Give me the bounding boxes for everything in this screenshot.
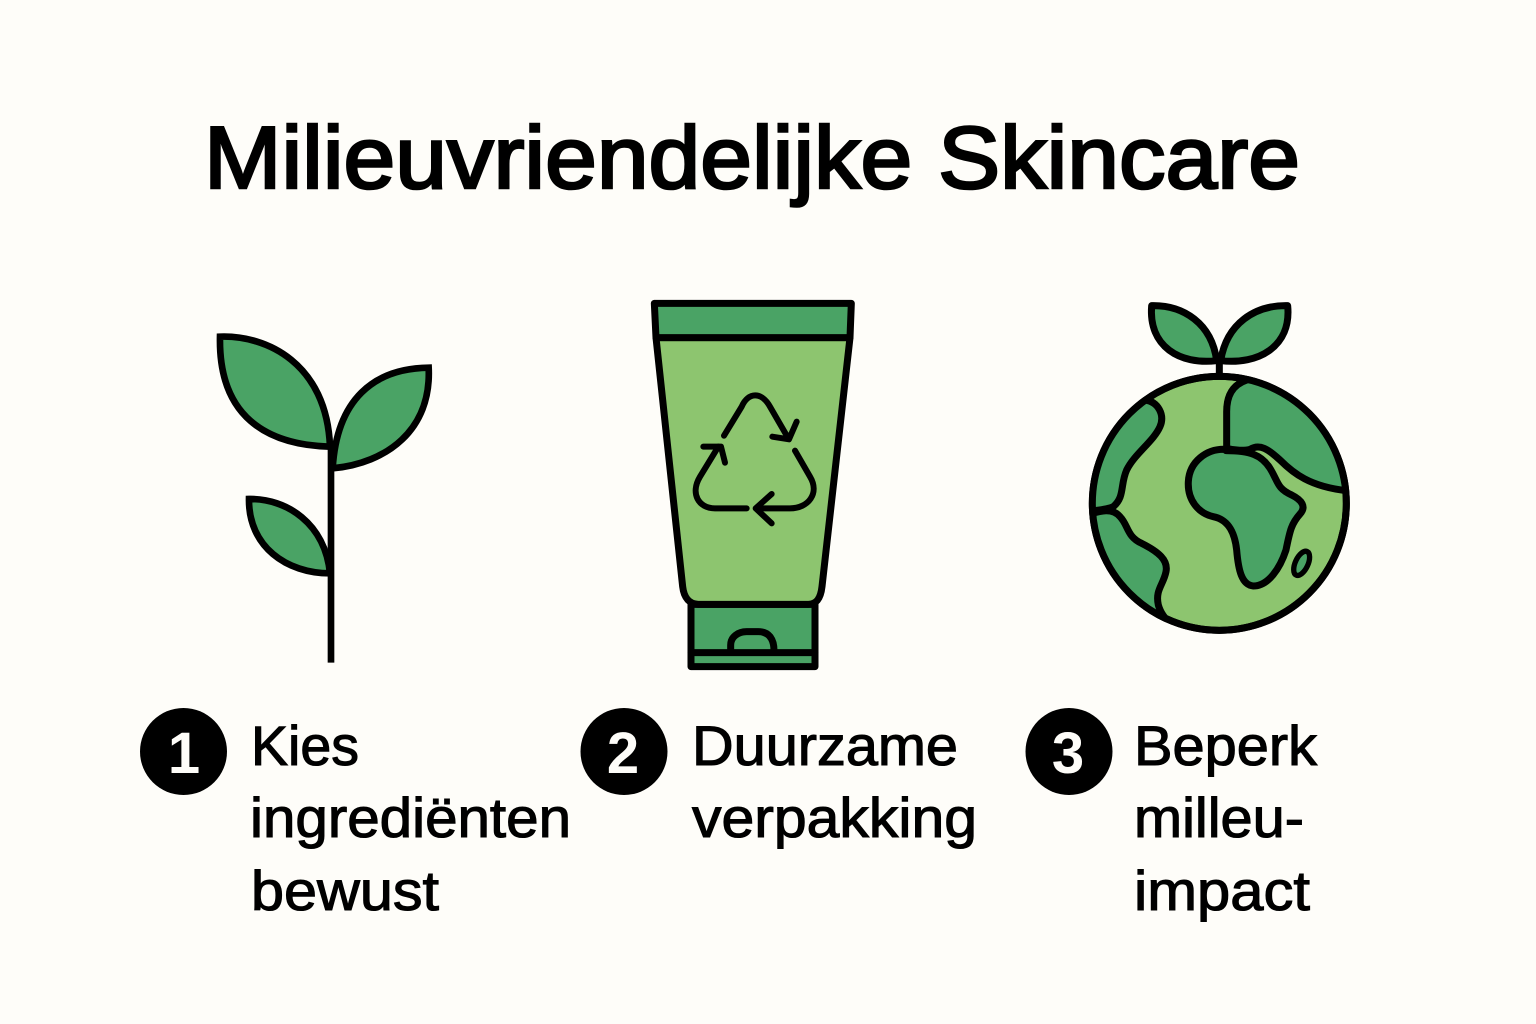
Africa continent bbox=[1188, 449, 1303, 586]
icon: recyclable tube bbox=[654, 303, 851, 667]
step 1: number badge and label: bewust bbox=[251, 859, 439, 922]
step 1: number badge and label: ingrediënten bbox=[250, 786, 571, 849]
step 3: number badge and label: impact bbox=[1134, 859, 1310, 922]
icon: recycling arrows bbox=[696, 395, 814, 523]
step 3: number badge and label: 3 bbox=[1052, 721, 1084, 786]
Madagascar island bbox=[1290, 549, 1313, 578]
title: Milieuvriendelijke Skincare bbox=[204, 108, 1300, 207]
icon: plant with three leaves bbox=[220, 337, 429, 663]
step 2: number badge and label: 2 bbox=[607, 721, 639, 786]
step 2: number badge and label: verpakking bbox=[692, 786, 977, 849]
step 3: number badge and label: milleu- bbox=[1134, 786, 1304, 849]
step 2: number badge and label: Duurzame bbox=[692, 714, 958, 777]
step 3: number badge and label bbox=[1026, 708, 1318, 922]
step 2: number badge and label bbox=[580, 708, 977, 849]
step 1: number badge and label: Kies bbox=[251, 714, 359, 777]
step 1: number badge and label bbox=[140, 708, 571, 922]
step 1: number badge and label: 1 bbox=[168, 721, 200, 786]
icon: globe with sprout bbox=[1083, 306, 1357, 637]
step 3: number badge and label: Beperk bbox=[1134, 714, 1318, 777]
